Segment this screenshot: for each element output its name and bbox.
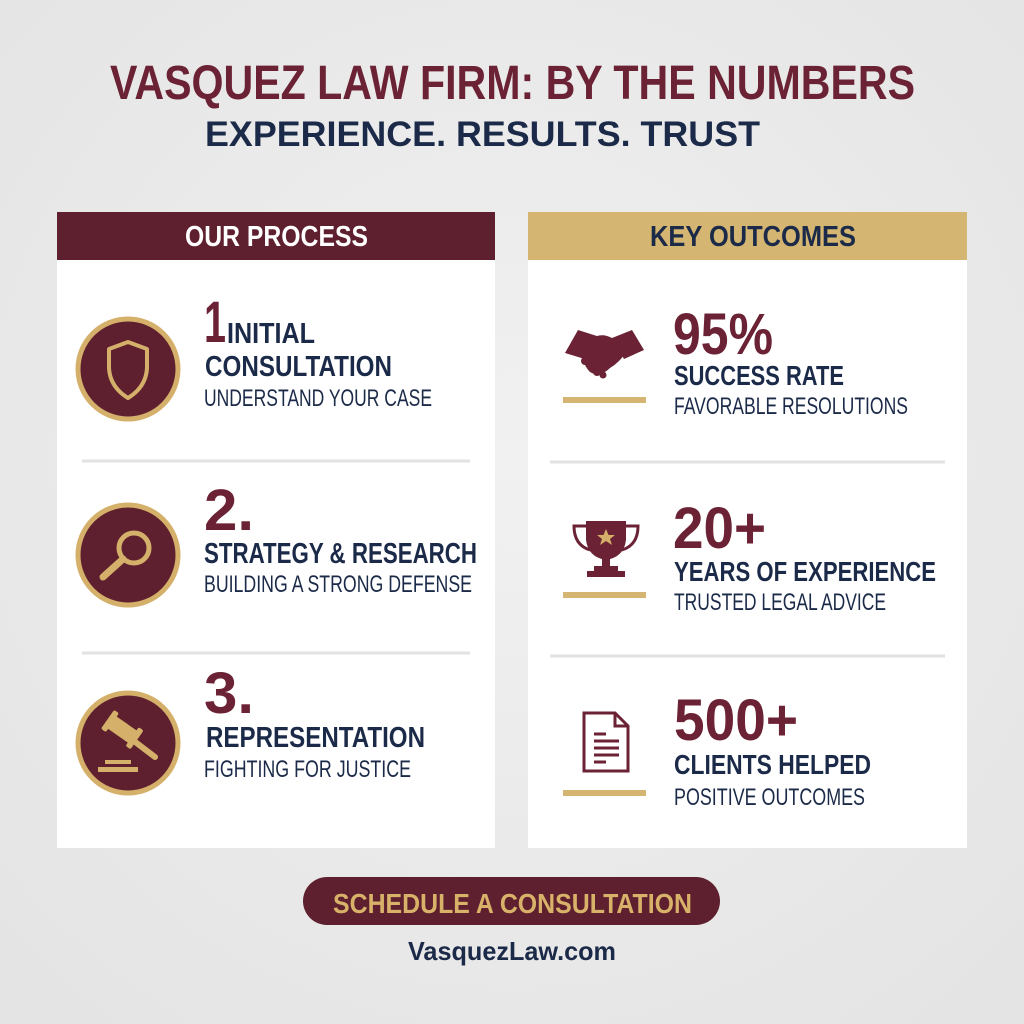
icon: handshake	[565, 330, 644, 378]
subtitle: EXPERIENCE. RESULTS. TRUST	[205, 115, 760, 154]
stat: 95%: 95%	[673, 302, 773, 367]
step 3 text: REPRESENTATION	[206, 722, 425, 754]
step 2 text: BUILDING A STRONG DEFENSE	[204, 571, 472, 598]
step 3 text	[204, 661, 425, 783]
button: schedule a consultation	[303, 877, 720, 925]
website url: VasquezLaw.com	[408, 936, 616, 966]
stat: 20+	[673, 496, 936, 616]
icon: shield	[78, 319, 178, 419]
title: VASQUEZ LAW FIRM: BY THE NUMBERS	[110, 57, 915, 110]
stat: 95%: SUCCESS RATE	[674, 360, 844, 391]
step 1 text	[204, 290, 432, 412]
panel: our process	[57, 212, 495, 848]
stat: 500+: CLIENTS HELPED	[674, 749, 871, 780]
step 1 text: 1	[204, 290, 226, 355]
stat: 500+	[674, 688, 871, 811]
stat: 500+: POSITIVE OUTCOMES	[674, 784, 865, 811]
step 2 text: 2.	[204, 478, 254, 543]
stat: 95%	[673, 302, 908, 420]
step 2 text	[204, 478, 477, 598]
step 3 text: 3.	[204, 661, 254, 726]
icon: document	[584, 713, 628, 771]
step 1 text: CONSULTATION	[205, 351, 392, 383]
step 1 text: INITIAL	[227, 318, 315, 350]
icon: trophy	[574, 521, 638, 577]
stat: 20+: TRUSTED LEGAL ADVICE	[674, 589, 886, 616]
stat: 95%: FAVORABLE RESOLUTIONS	[674, 393, 908, 420]
stat: 500+: 500+	[674, 688, 798, 753]
step 2 text: STRATEGY & RESEARCH	[204, 538, 477, 570]
panel header: our process	[57, 212, 495, 260]
panel: key outcomes	[528, 212, 967, 848]
panel header: key outcomes: KEY OUTCOMES	[650, 221, 856, 253]
stat: 20+: 20+	[673, 496, 766, 561]
step 3 text: FIGHTING FOR JUSTICE	[204, 756, 411, 783]
icon: magnifier	[78, 505, 178, 605]
panel header: key outcomes	[528, 212, 967, 260]
panel header: our process: OUR PROCESS	[185, 221, 368, 253]
stat: 20+: YEARS OF EXPERIENCE	[674, 556, 936, 587]
icon: gavel	[78, 693, 178, 793]
step 1 text: UNDERSTAND YOUR CASE	[204, 385, 432, 412]
button: schedule a consultation: SCHEDULE A CONSULTATION	[333, 888, 692, 919]
